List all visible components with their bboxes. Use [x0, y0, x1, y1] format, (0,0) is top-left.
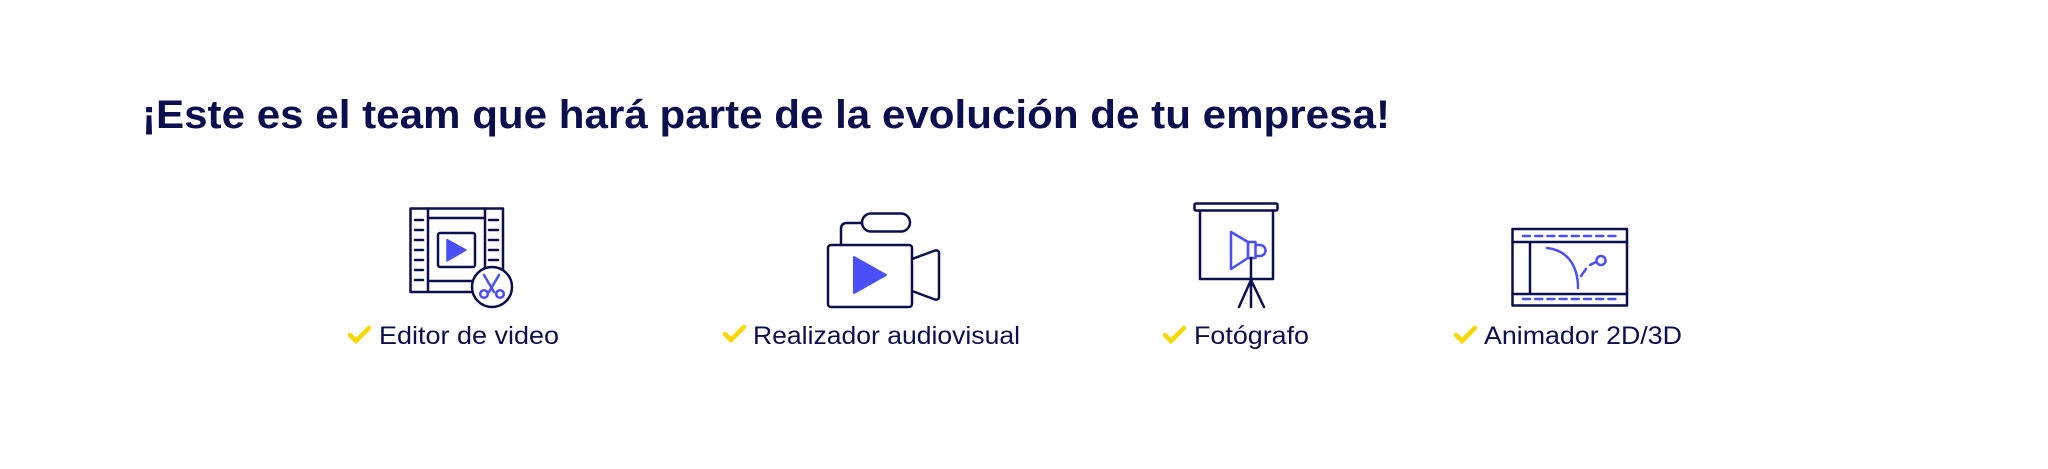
title: ¡Este es el team que hará parte de la evolución de tu empresa! — [142, 93, 1390, 137]
icon: film strip with scissors — [410, 208, 512, 307]
checkmark — [350, 328, 369, 341]
item: realizador audiovisual — [725, 214, 1020, 350]
icon: video camera — [828, 214, 939, 307]
checkmark — [725, 327, 744, 340]
item: animador 2D/3D — [1456, 229, 1682, 350]
label: Editor de video — [379, 322, 559, 350]
item: editor de video — [350, 208, 559, 350]
label: Fotógrafo — [1194, 322, 1309, 350]
label: Realizador audiovisual — [753, 322, 1020, 350]
label: Animador 2D/3D — [1484, 322, 1682, 350]
icon: animation film frame — [1512, 229, 1627, 306]
checkmark — [1165, 328, 1184, 341]
icon: studio backdrop and light — [1194, 204, 1278, 307]
item: fotógrafo — [1165, 204, 1309, 350]
checkmark — [1456, 328, 1475, 341]
